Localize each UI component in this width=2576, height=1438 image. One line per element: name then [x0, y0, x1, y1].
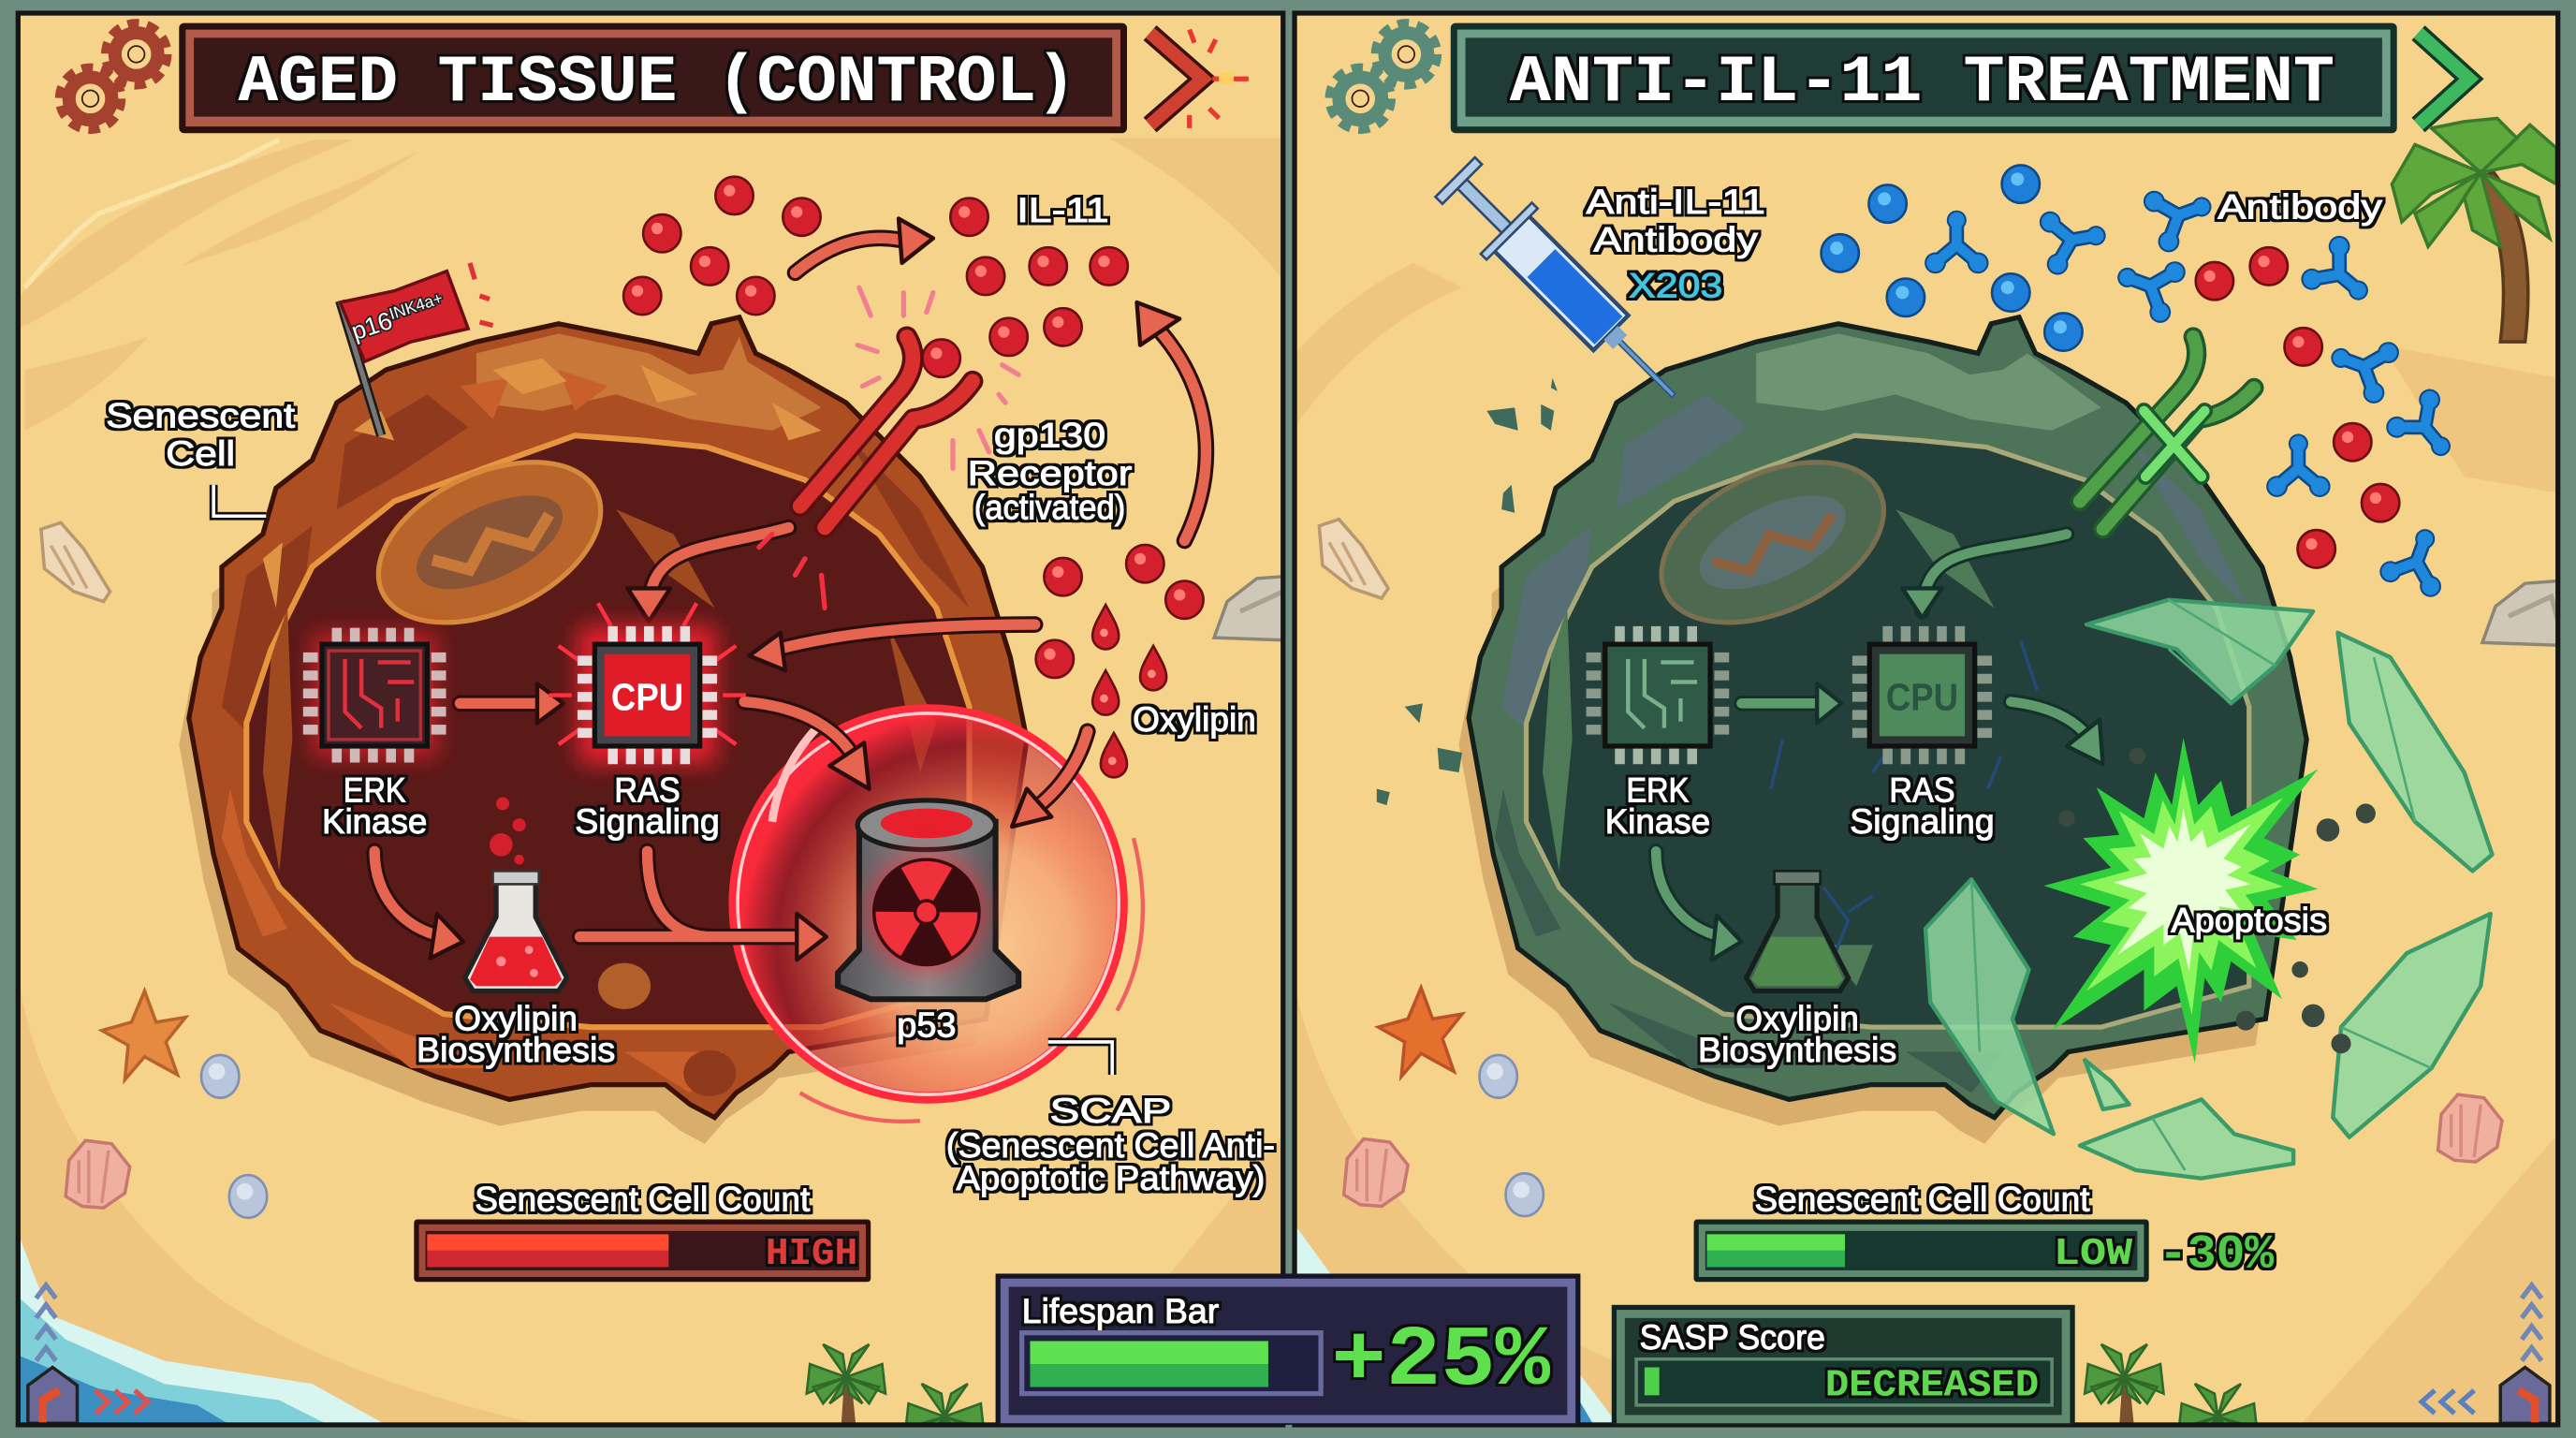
cell shadow: [1459, 344, 2297, 1144]
label: senescent cell count: Senescent Cell Count: [475, 1181, 810, 1219]
gauge: senescent cell count high: [414, 1220, 871, 1282]
cell shadow: [179, 344, 1017, 1144]
label: oxylipin biosynthesis: Oxylipin: [1735, 1000, 1859, 1038]
icon: flask inactive: [1747, 871, 1848, 991]
stat: minus 30 percent: -30%: [2159, 1228, 2275, 1282]
chip: ras inactive: [1860, 635, 1984, 756]
title banner: [1451, 23, 2397, 133]
label: antibody: Antibody: [2217, 187, 2383, 226]
chip: ras cpu: [549, 603, 746, 764]
title banner: [179, 23, 1127, 133]
label: gp130 receptor: (activated): [974, 489, 1125, 527]
icon: p16 flag: p16: [348, 306, 396, 345]
icon: p16 flag: [340, 263, 493, 435]
beach decorations: [28, 522, 1306, 1438]
icon: p53 canister: [838, 800, 1018, 999]
palm tree: [2392, 118, 2556, 342]
title banner: AGED TISSUE (CONTROL): [238, 47, 1076, 121]
labels: erk and ras: ERK: [344, 771, 406, 810]
panel: sasp score: DECREASED: [1825, 1364, 2039, 1407]
panel: sasp score: [1612, 1305, 2075, 1425]
labels: erk and ras: Kinase: [1605, 802, 1710, 841]
debris fragments: [2058, 748, 2376, 1053]
label: oxylipin: Oxylipin: [1133, 700, 1256, 739]
panel: sasp score: SASP Score: [1640, 1318, 1825, 1357]
arrows: signalling: [374, 218, 1206, 960]
icon: gears: [1329, 23, 1438, 130]
scap shield: [735, 710, 1143, 1122]
chip: erk kinase: [311, 633, 439, 757]
label: anti-il-11 antibody x203: [1587, 183, 1765, 305]
panel: lifespan bar: +25%: [1332, 1313, 1550, 1410]
label: scap: SCAP: [1050, 1092, 1171, 1130]
apoptosis burst: [2043, 738, 2318, 1064]
label: oxylipin biosynthesis: [1698, 1000, 1896, 1069]
gauge: senescent cell count low: LOW: [2054, 1233, 2133, 1276]
label: senescent cell: [106, 396, 295, 516]
gauge: senescent cell count low: [1694, 1220, 2149, 1282]
label: oxylipin biosynthesis: Biosynthesis: [417, 1031, 615, 1069]
label: scap: [946, 1042, 1275, 1197]
chip: erk inactive: [1593, 635, 1721, 756]
label: senescent cell: Senescent: [106, 396, 295, 434]
labels: erk and ras: Kinase: [322, 802, 427, 841]
label: gp130 receptor: gp130: [994, 416, 1105, 454]
labels: erk and ras: ERK: [1627, 771, 1690, 810]
labels: erk and ras: Signaling: [575, 802, 720, 841]
label: anti-il-11 antibody x203: Anti-IL-11: [1587, 183, 1765, 221]
icon: flask: [465, 797, 567, 991]
label: gp130 receptor: [968, 416, 1132, 527]
chip: ras inactive: CPU: [1886, 675, 1958, 718]
gauge: senescent cell count high: HIGH: [766, 1233, 857, 1276]
panel: anti-il-11 treatment: [1295, 13, 2574, 1438]
label: anti-il-11 antibody x203: Antibody: [1593, 221, 1759, 259]
labels: erk and ras: Signaling: [1850, 802, 1995, 841]
label: senescent cell: Cell: [166, 434, 235, 473]
panel: aged tissue control: [18, 13, 1306, 1438]
label: oxylipin biosynthesis: Biosynthesis: [1698, 1031, 1896, 1069]
title banner: ANTI-IL-11 TREATMENT: [1510, 47, 2334, 121]
senescent cell body: [189, 317, 1027, 1118]
label: gp130 receptor: Receptor: [968, 454, 1132, 492]
icon: blocked gp130 receptor: [2080, 337, 2254, 529]
chip: ras cpu: CPU: [611, 675, 683, 718]
labels: erk and ras: RAS: [1889, 771, 1955, 810]
labels: erk and ras: [322, 771, 720, 841]
label: senescent cell count: Senescent Cell Count: [1754, 1181, 2089, 1219]
icon: red chevron: [1150, 30, 1249, 128]
icon: gears: [59, 23, 168, 130]
label: oxylipin biosynthesis: [417, 1000, 615, 1069]
panel: lifespan bar: [996, 1273, 1580, 1425]
label: p53: p53: [897, 1006, 956, 1045]
il-11 particles: [623, 177, 1128, 377]
icon: gp130 receptor activated: [759, 287, 1018, 609]
debris: [1377, 378, 1558, 805]
labels: erk and ras: RAS: [614, 771, 681, 810]
icon: p16 flag: INK4a+: [387, 288, 446, 323]
label: apoptosis: Apoptosis: [2171, 901, 2327, 939]
mitochondrion: [353, 430, 626, 655]
icon: syringe: [1429, 152, 1699, 421]
faded mitochondrion: [1636, 430, 1909, 655]
dying cell body: [1469, 317, 2306, 1118]
labels: erk and ras: [1605, 771, 1995, 841]
label: il-11: IL-11: [1017, 191, 1109, 229]
label: scap: Apoptotic Pathway): [956, 1159, 1265, 1197]
beach decorations: [1319, 520, 2574, 1438]
oxylipin droplets: [1036, 545, 1204, 777]
label: anti-il-11 antibody x203: X203: [1629, 267, 1722, 305]
arrows: blocked signalling: [1656, 535, 2103, 960]
shattered shield shards: [1925, 600, 2492, 1179]
icon: green chevron: [2419, 33, 2469, 125]
antibodies and il-11 particles: [1822, 165, 2471, 600]
label: oxylipin biosynthesis: Oxylipin: [454, 1000, 578, 1038]
panel: lifespan bar: Lifespan Bar: [1022, 1292, 1219, 1330]
label: scap: (Senescent Cell Anti-: [946, 1126, 1275, 1165]
